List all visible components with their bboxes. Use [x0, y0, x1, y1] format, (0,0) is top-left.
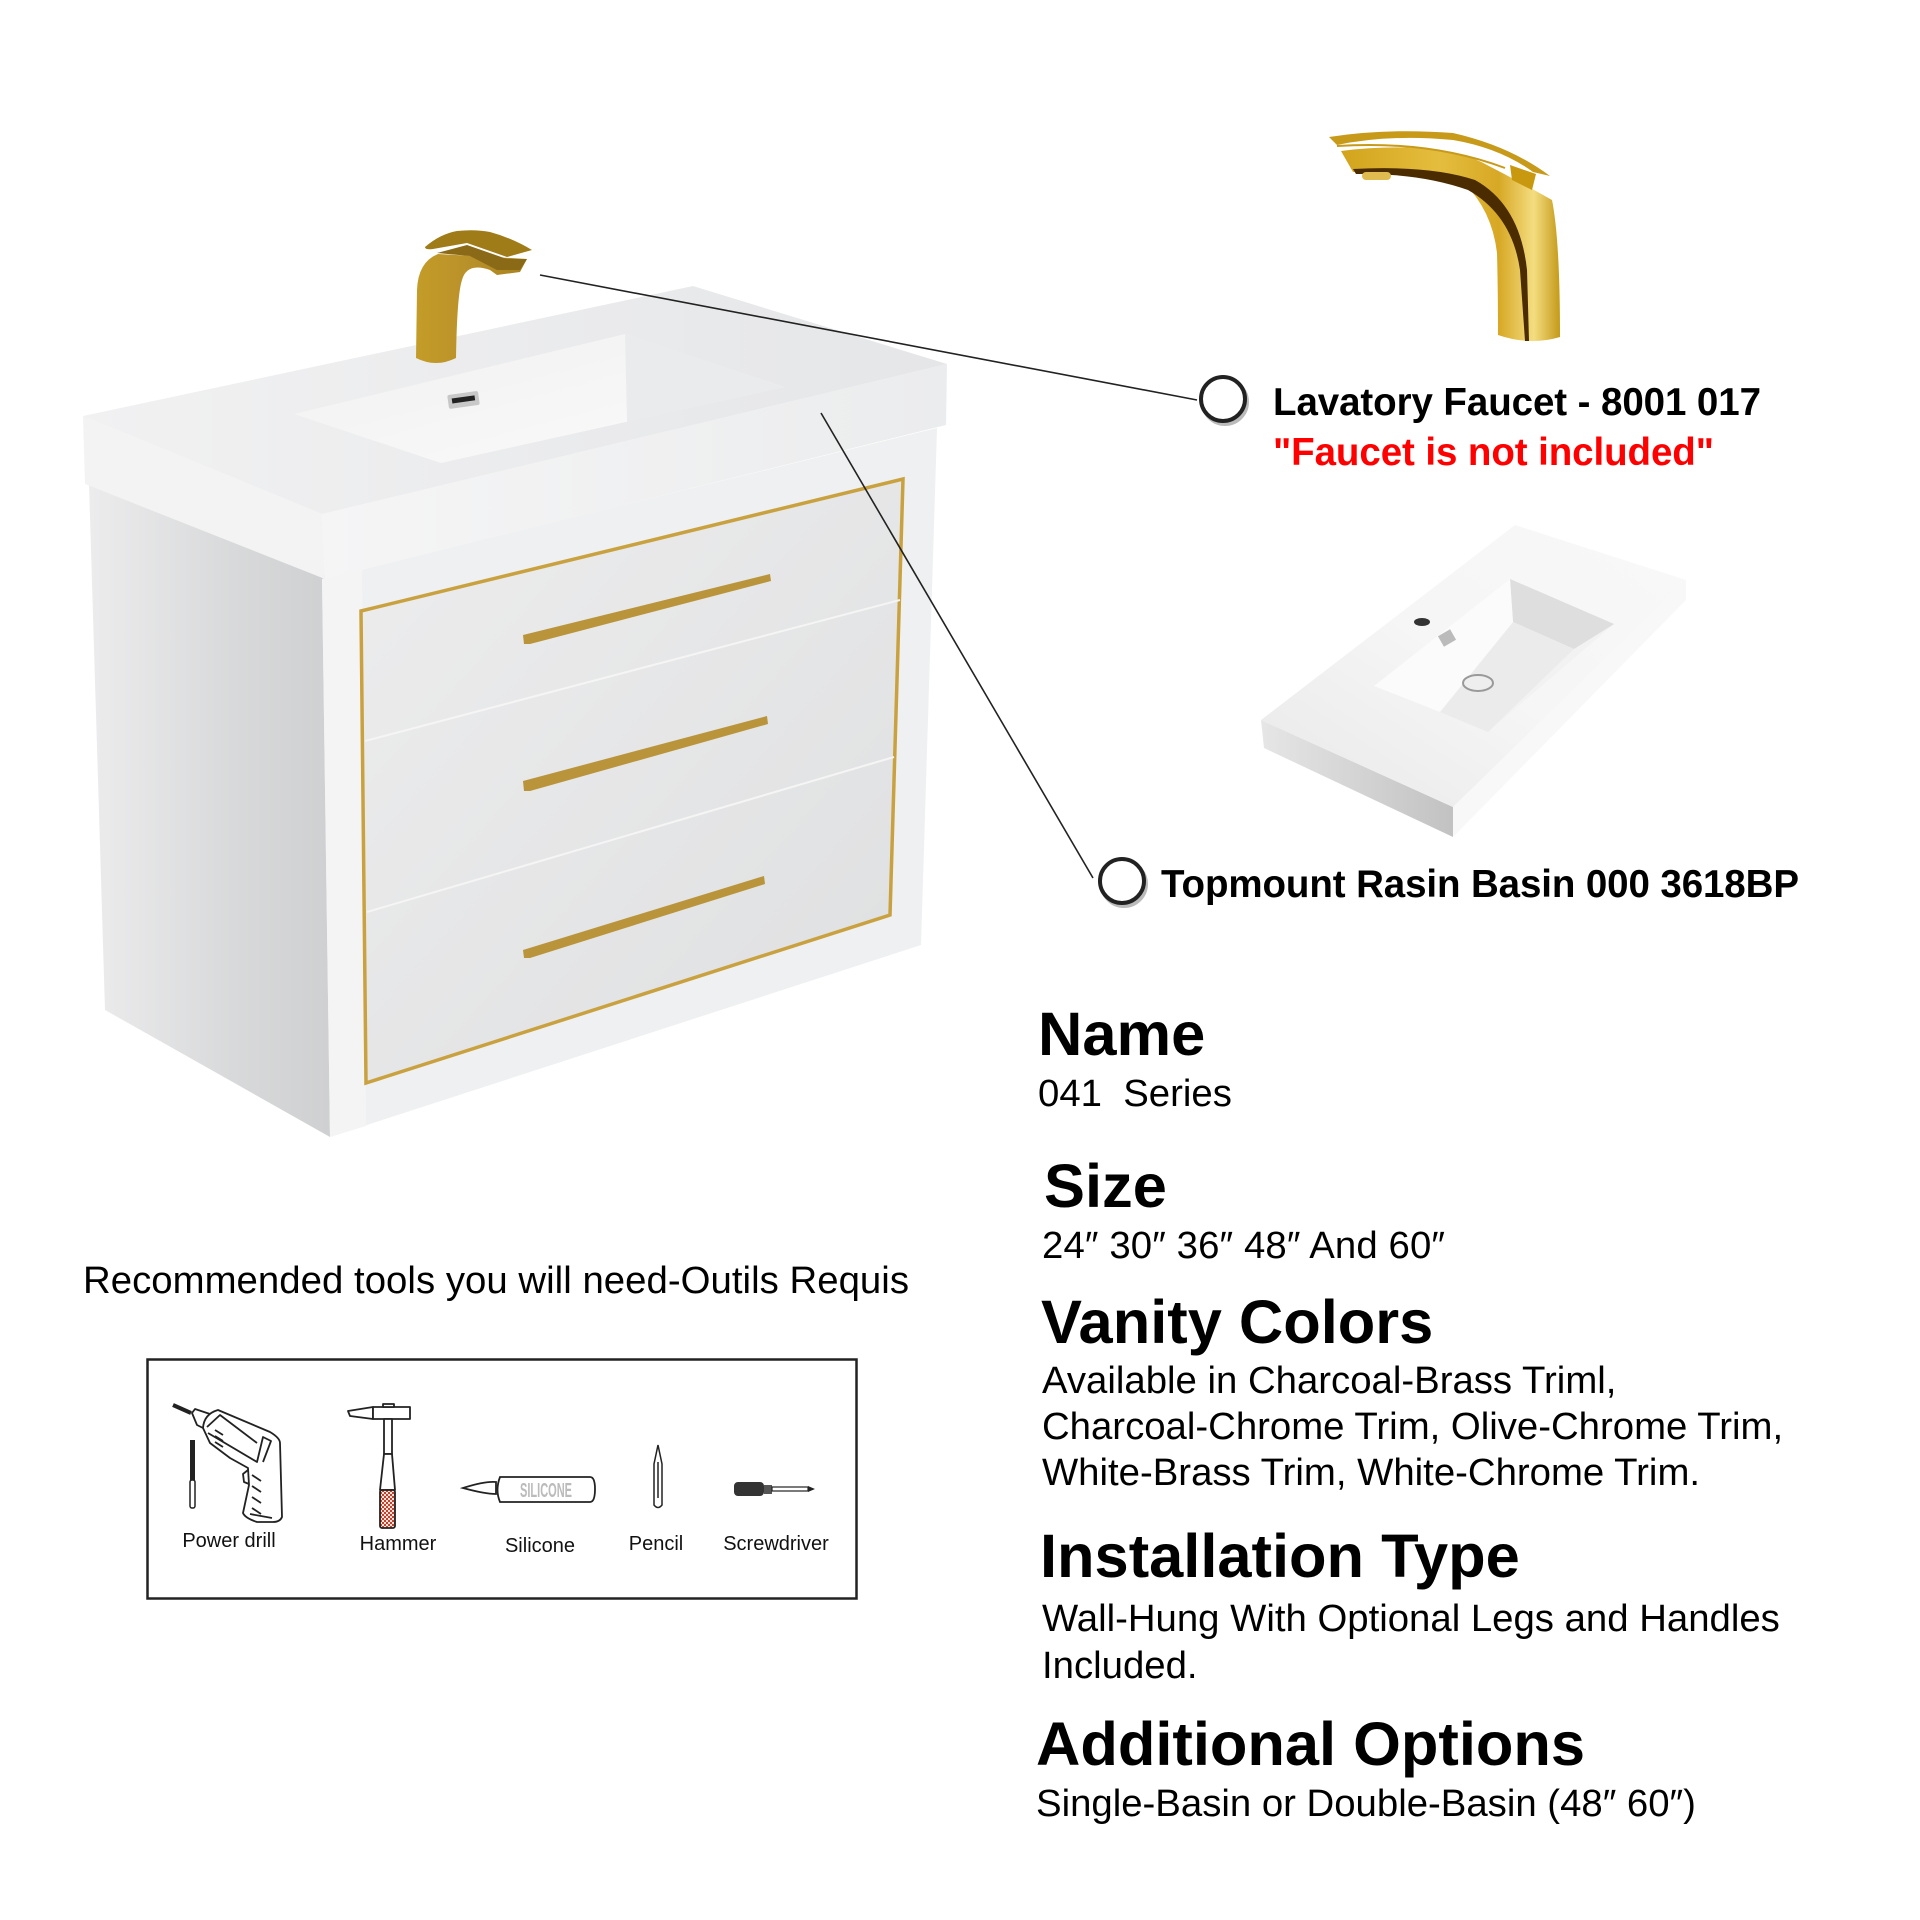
callout: basin marker [1100, 859, 1146, 906]
vanity cabinet illustration [83, 286, 947, 1137]
counter top front fascia [322, 364, 947, 579]
drawer dividers [365, 600, 900, 741]
callout: faucet label: Lavatory Faucet - 8001 017 [1273, 381, 1761, 424]
label: screwdriver: Screwdriver [723, 1533, 829, 1555]
vanity colors text [1042, 1359, 1783, 1494]
tools panel [148, 1360, 856, 1598]
tools heading: Recommended tools you will need-Outils Requis [83, 1259, 909, 1302]
label: hammer: Hammer [360, 1533, 437, 1555]
chrome gold faucet photo [1329, 131, 1560, 341]
vanity colors text: Charcoal-Chrome Trim, Olive-Chrome Trim, [1042, 1405, 1783, 1448]
installation type text [1042, 1597, 1780, 1687]
counter top surface [83, 286, 947, 514]
icon: power drill [173, 1405, 282, 1522]
installation type text: Included. [1042, 1644, 1198, 1687]
icon: pencil [654, 1445, 662, 1508]
label: pencil: Pencil [629, 1533, 683, 1555]
drawer handles [523, 574, 771, 958]
heading: name: Name [1038, 1000, 1205, 1069]
icon: screwdriver [734, 1482, 815, 1496]
callout: faucet marker [1201, 377, 1247, 424]
heading: installation type: Installation Type [1040, 1522, 1520, 1591]
vanity colors text: White-Brass Trim, White-Chrome Trim. [1042, 1451, 1700, 1494]
name value: 041 Series [1038, 1072, 1232, 1115]
vanity faucet [416, 230, 532, 363]
heading: size: Size [1044, 1152, 1167, 1221]
additional options text: Single-Basin or Double-Basin (48″ 60″) [1036, 1782, 1696, 1825]
leader line to faucet [540, 275, 1197, 400]
size value: 24″ 30″ 36″ 48″ And 60″ [1042, 1224, 1445, 1267]
heading: additional options: Additional Options [1036, 1710, 1585, 1779]
cabinet left side [89, 484, 330, 1137]
sink bowl [294, 334, 784, 463]
leader line to basin [821, 413, 1093, 878]
icon: silicone tube: SILICONE [520, 1480, 572, 1502]
overflow drain [447, 391, 480, 409]
vanity colors text: Available in Charcoal-Brass Triml, [1042, 1359, 1616, 1402]
counter top left edge [83, 416, 325, 579]
cabinet front frame [322, 428, 937, 1137]
icon: hammer [348, 1404, 410, 1528]
callout: basin label: Topmount Rasin Basin 000 3618BP [1161, 863, 1799, 906]
installation type text: Wall-Hung With Optional Legs and Handles [1042, 1597, 1780, 1640]
label: silicone: Silicone [505, 1535, 575, 1557]
callout: not included warning: "Faucet is not included" [1273, 431, 1714, 474]
drawer fronts [360, 478, 904, 1084]
label: power drill: Power drill [182, 1530, 276, 1552]
basin photo [1261, 525, 1686, 837]
brass trim [361, 479, 903, 1083]
icon: silicone tube [463, 1477, 595, 1502]
icon: drill bit [190, 1440, 195, 1508]
heading: vanity colors: Vanity Colors [1041, 1288, 1433, 1357]
